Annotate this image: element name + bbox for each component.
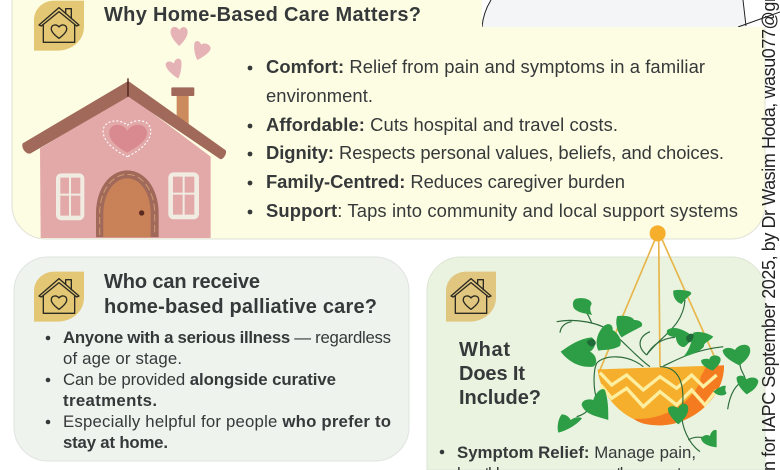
heading: who can receive [104,271,377,318]
heading: why home-based care matters: Why Home-Based Care Matters? [104,4,421,26]
heart window [109,125,147,153]
stems [557,300,745,452]
panel: why home-based care matters [12,0,765,239]
illustration: pink house [22,27,226,238]
heading: what does it include: Include? [459,387,541,409]
list: reasons: Support: Taps into community and local support systems [266,200,738,221]
heading: what does it include: Does It [459,363,525,385]
list: reasons [248,56,738,221]
panel: what does it include [427,225,765,470]
chimney [177,95,189,127]
heading: who can receive: Who can receive [104,271,260,293]
icon: floating hearts [166,27,211,79]
list: eligibility: stay at home. [63,433,168,452]
icon: home with heart [34,1,84,51]
credit: vertical attribution: n for IAPC September 2025, by Dr Wasim Hoda, wasu077@gr [759,0,779,470]
illustration: hanging plant [557,225,758,452]
leaves [558,290,758,447]
house body [40,95,211,238]
door [96,170,159,237]
list: reasons: Affordable: Cuts hospital and travel costs. [266,114,618,135]
heading: what does it include: What [459,339,510,361]
icon: home with heart [34,272,84,322]
list: eligibility: Can be provided alongside curative [63,370,336,389]
list: eligibility: treatments. [63,391,157,410]
panel: who can receive [14,257,409,461]
right window [168,172,199,219]
pot [598,365,724,425]
list: reasons: Family-Centred: Reduces caregiver burden [266,171,625,192]
left window [56,173,84,220]
list: reasons: Comfort: Relief from pain and symptoms in a familiar [266,56,705,77]
list: eligibility: Anyone with a serious illness — regardless [63,328,391,347]
hanging strings [600,233,718,370]
list: inclusions [440,443,709,470]
list: reasons: Dignity: Respects personal values, beliefs, and choices. [266,142,724,163]
heading: who can receive: home-based palliative care? [104,296,377,318]
panel: top grey shape [482,0,780,27]
list: inclusions: Symptom Relief: Manage pain, [457,443,696,462]
list: eligibility: of age or stage. [63,349,182,368]
icon: home with heart [446,272,496,322]
list: reasons: environment. [266,85,373,106]
heading: what does it include [459,339,541,409]
list: eligibility [46,328,391,452]
roof [22,81,226,159]
list: eligibility: Especially helpful for people who prefer to [63,412,391,431]
